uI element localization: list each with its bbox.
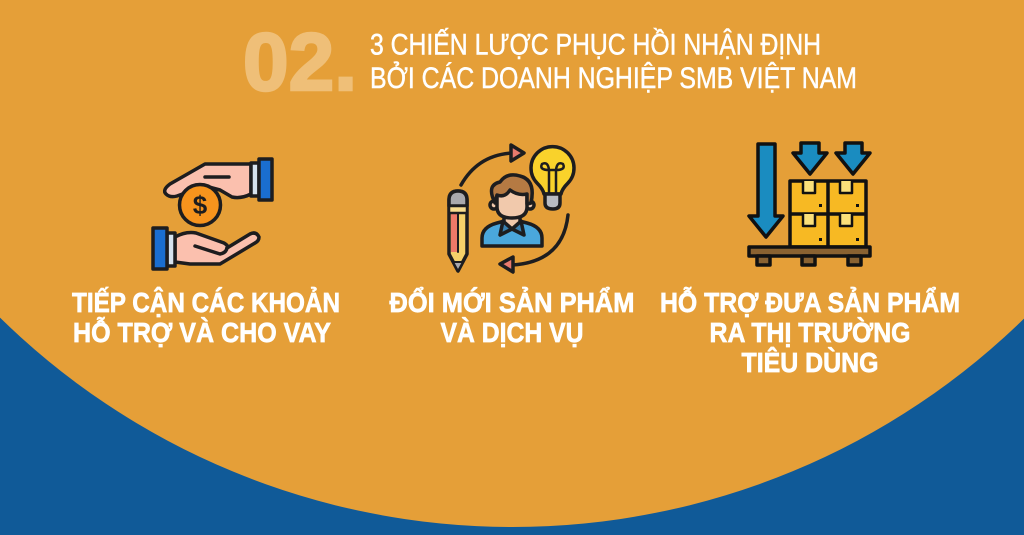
- person: [482, 219, 542, 246]
- heading: BỞI CÁC DOANH NGHIỆP SMB VIỆT NAM: [370, 61, 857, 95]
- label: market support: [660, 286, 960, 378]
- label: innovation: VÀ DỊCH VỤ: [440, 317, 584, 348]
- icon: hands with coin: $: [193, 190, 208, 220]
- label: innovation: [390, 286, 634, 348]
- label: loans: [72, 286, 340, 348]
- heading: [370, 28, 857, 95]
- label: market support: HỖ TRỢ ĐƯA SẢN PHẨM: [660, 286, 960, 318]
- label: innovation: ĐỔI MỚI SẢN PHẨM: [390, 286, 634, 318]
- label: loans: TIẾP CẬN CÁC KHOẢN: [72, 286, 340, 318]
- light bulb: [531, 147, 574, 194]
- label: market support: TIÊU DÙNG: [742, 347, 878, 378]
- lower hand: [175, 232, 259, 264]
- label: loans: HỖ TRỢ VÀ CHO VAY: [73, 317, 331, 348]
- icon: boxes on a pallet with down arrows: [749, 143, 870, 265]
- section number: 02.: [243, 17, 357, 108]
- pallet: [749, 247, 870, 256]
- upper hand: [165, 164, 251, 198]
- label: market support: RA THỊ TRƯỜNG: [710, 317, 910, 348]
- pencil: [449, 191, 467, 271]
- boxes: [790, 181, 866, 247]
- icon: person, pencil, light bulb: [449, 145, 574, 272]
- heading: 3 CHIẾN LƯỢC PHỤC HỒI NHẬN ĐỊNH: [370, 28, 821, 62]
- cycle arrows: [461, 153, 512, 185]
- icon: hands with coin: [153, 159, 272, 269]
- arrows: [749, 144, 783, 237]
- coin: [180, 184, 220, 226]
